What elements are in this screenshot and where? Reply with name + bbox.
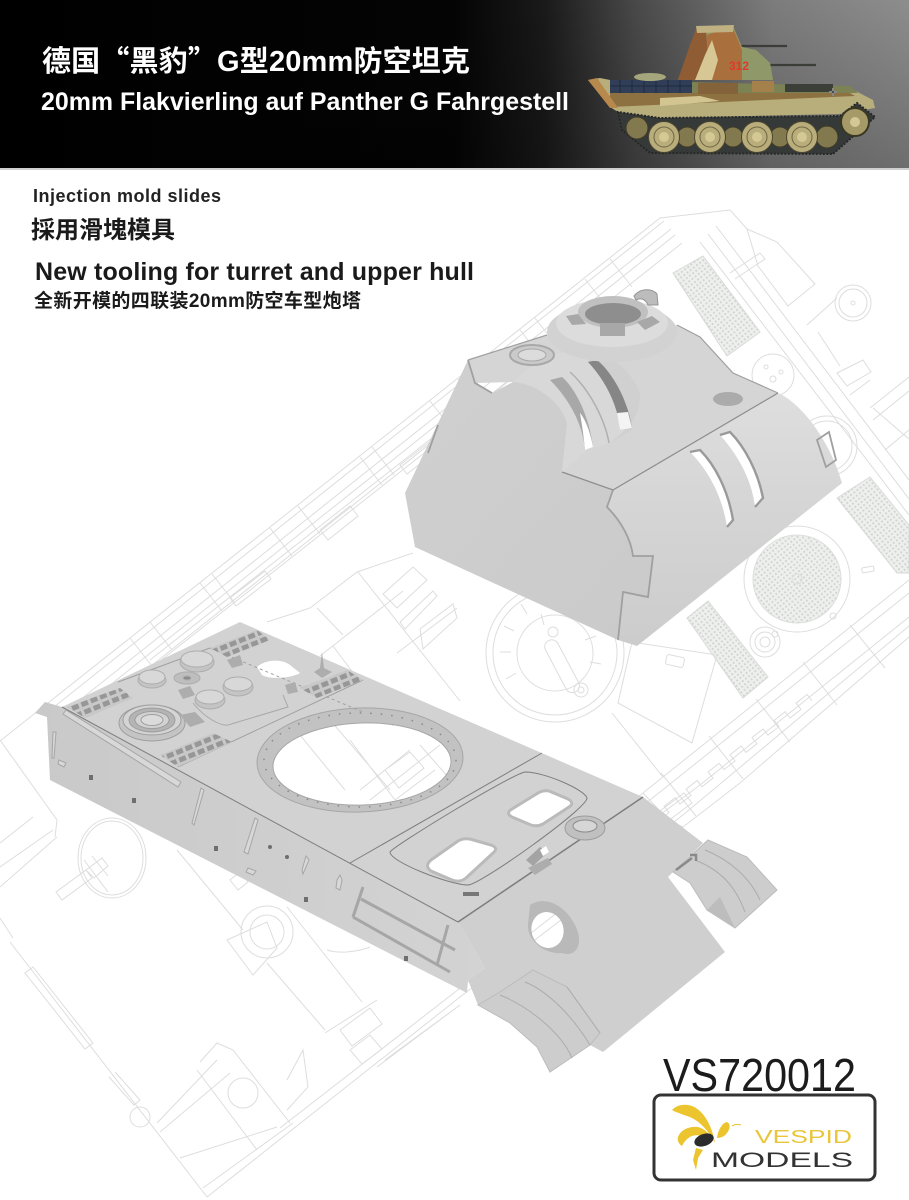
logo frame [654, 1095, 875, 1180]
text: Chinese new tooling: 全新开模的四联装20mm防空车型炮塔 [34, 289, 361, 312]
turret: front slots [690, 432, 763, 527]
hull: front stowage frame [353, 887, 455, 972]
banner [0, 0, 909, 170]
text: Chinese injection mold slides: 採用滑塊模具 [31, 210, 175, 245]
turret: seam lines [428, 325, 836, 640]
blueprint: engine deck boxes upper right [612, 226, 909, 777]
hull: side rails and stowage brackets [52, 710, 342, 890]
turret: right front face [607, 393, 842, 646]
turret: base silhouette and rear deck [468, 325, 778, 490]
logo: MODELS wordmark: MODELS [711, 1149, 853, 1172]
hull: turret ring [257, 708, 463, 812]
blueprint: rear suspension assembly [130, 1000, 460, 1188]
tank: turret: 312 [729, 59, 749, 73]
logo: Vespid Models [654, 1095, 875, 1180]
blueprint: small circular hatches and fans [665, 285, 874, 668]
hull: right fender [673, 840, 777, 928]
hull: hatch front fittings [463, 816, 605, 896]
blueprint: upper track band [0, 210, 747, 741]
tank: road wheels [626, 108, 869, 152]
hull: left fender [478, 970, 600, 1072]
tank: turret [678, 25, 773, 80]
hull: driver port flange [528, 901, 579, 954]
turret: hump with slots [513, 350, 640, 472]
text: new tooling: New tooling for turret and upper hull [35, 258, 474, 286]
hull: engine deck round covers [138, 651, 253, 709]
turret: left side face [405, 360, 653, 640]
blueprint: perforated louvre grilles [673, 256, 909, 698]
hull: front glacis plate [458, 797, 725, 1052]
turret: small ring hatch [510, 345, 554, 365]
hull: engine deck fittings [178, 652, 332, 727]
tank: hull side [588, 73, 875, 118]
hull: side bolts [89, 775, 408, 961]
blueprint: lower flange assembly [177, 850, 370, 1030]
turret: round port [713, 392, 743, 406]
hull: top deck with turret ring and hatch cut-outs [62, 622, 643, 922]
hull: seam lines [62, 648, 643, 922]
tank: guns [738, 46, 816, 65]
illustration: camouflaged Flakpanzer side view [588, 25, 875, 154]
tank: tracks [618, 103, 875, 154]
blueprint: rear deck bars [267, 553, 460, 800]
title: English: 20mm Flakvierling auf Panther G Fahrgestell [41, 88, 569, 116]
logo: VESPID wordmark: VESPID [755, 1127, 852, 1147]
blueprint: lower left ring and gun mount [0, 740, 207, 1197]
turret: cupola [547, 290, 677, 362]
blueprint: circular fan grating [744, 526, 850, 637]
text: injection mold slides: Injection mold slides [33, 186, 221, 206]
banner background [0, 0, 909, 170]
3D model: upper hull [35, 622, 777, 1072]
logo: wasp icon [672, 1105, 741, 1170]
blueprint: turret traverse circle [486, 584, 624, 722]
hull: large bearing ring [119, 705, 185, 741]
hull: side panel [35, 702, 485, 993]
title: Chinese: 德国“黑豹”G型20mm防空坦克 [42, 38, 470, 80]
hull: window rims [428, 791, 572, 881]
hull: louvre grilles [67, 630, 363, 767]
product code: VS720012 [663, 1049, 856, 1101]
3D model: turret [405, 290, 842, 646]
blueprint: lower track band [207, 580, 909, 1197]
